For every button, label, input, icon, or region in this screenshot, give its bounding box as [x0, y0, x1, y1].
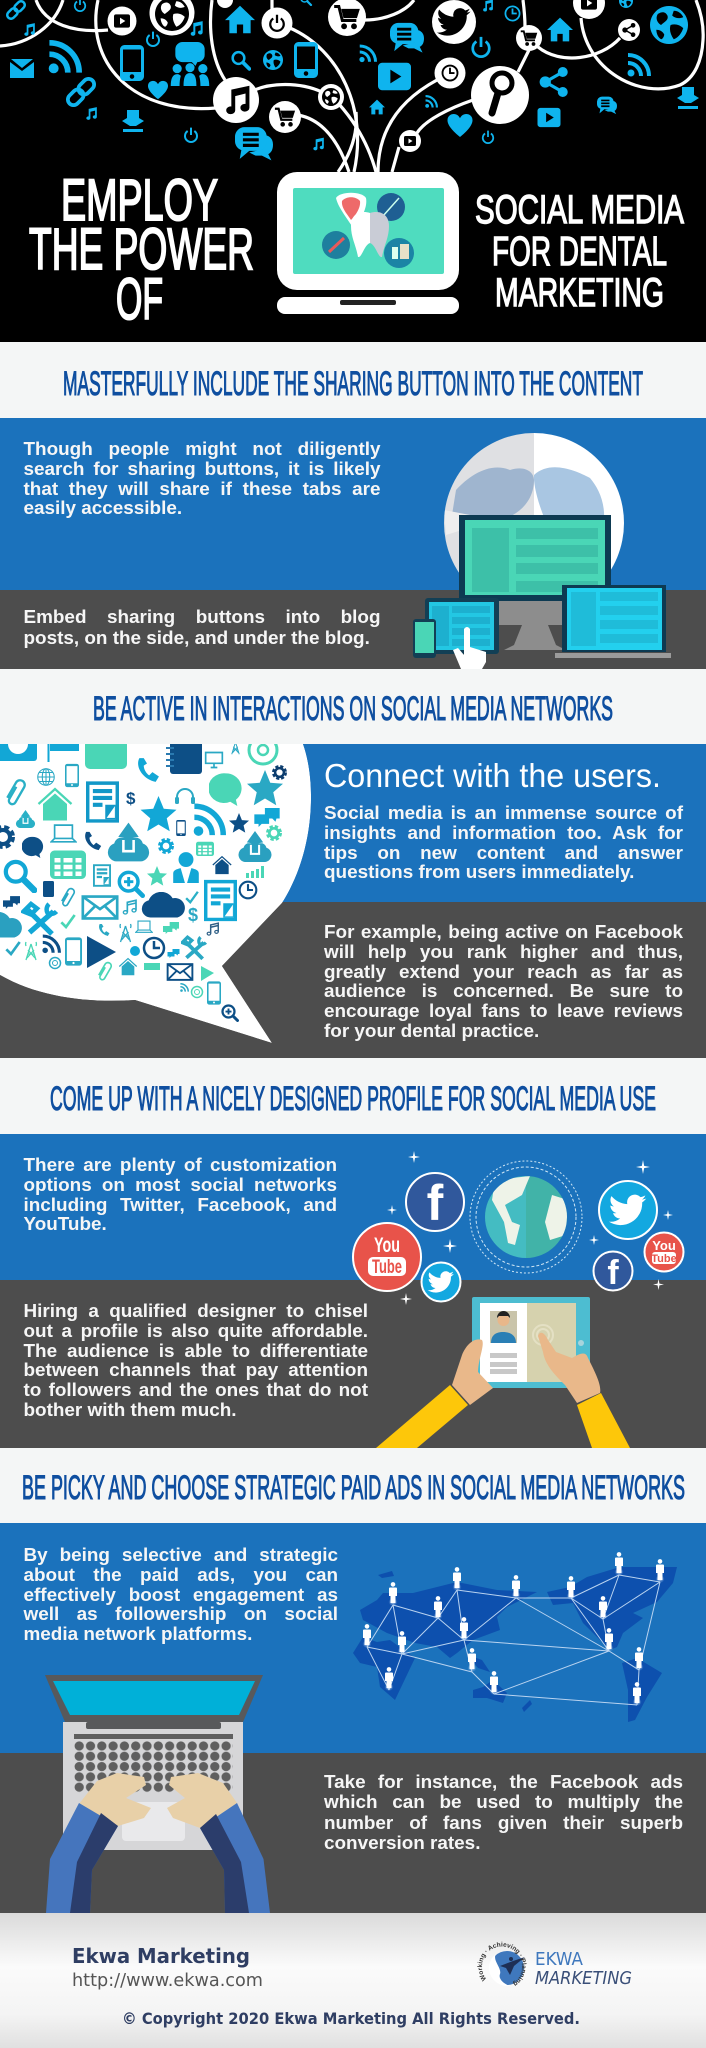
text: selective paid ads: about the paid ads, you can	[24, 1565, 338, 1586]
text: hiring designer: bother with them much.	[24, 1400, 237, 1421]
social icons: facebook, youtube, twitter: Tube	[372, 1257, 402, 1278]
text: facebook example: for your dental practice.	[324, 1021, 539, 1042]
panel 3 blue	[0, 1134, 706, 1280]
footer logo: Working · Achieving · Planning	[477, 1942, 527, 1986]
text: customization options: options on most social networks	[24, 1175, 337, 1196]
panel 1 blue	[0, 418, 706, 590]
title left: EMPLOY	[61, 168, 218, 233]
text: facebook example: greatly extend your reach as far as	[324, 962, 683, 983]
text: selective paid ads: media network platforms.	[24, 1624, 252, 1645]
footer company name and url: Ekwa Marketing	[72, 1944, 250, 1968]
social icons: facebook, youtube, twitter	[353, 1151, 684, 1305]
text: selective paid ads: well as followership on social	[24, 1604, 338, 1625]
speech bubble full of icons: $	[126, 789, 136, 808]
title left	[29, 168, 254, 332]
white icon nodes	[108, 0, 640, 152]
text: sharing intro: Though people might not diligently	[24, 439, 380, 460]
text: social media source: tips on new content and answer	[324, 843, 683, 864]
text: embed buttons	[24, 607, 380, 648]
panel 4 gray	[0, 1753, 706, 1913]
panel 2 blue	[0, 744, 706, 902]
text: embed buttons: posts, on the side, and under the blog.	[24, 628, 370, 648]
text: selective paid ads: By being selective and strategic	[24, 1545, 338, 1566]
text: sharing intro	[24, 439, 380, 519]
social icons: facebook, youtube, twitter: Tube	[651, 1253, 677, 1265]
footer copyright: © Copyright 2020 Ekwa Marketing All Rights Reserved.	[122, 2009, 580, 2028]
text: social media source: insights and information too. Ask for	[324, 823, 683, 844]
footer company name and url	[72, 1944, 263, 1991]
text: customization options: YouTube.	[24, 1214, 107, 1235]
text: hiring designer	[24, 1301, 368, 1421]
panel 1 gray	[0, 590, 706, 669]
text: customization options: There are plenty of customization	[24, 1155, 337, 1176]
social icons: facebook, youtube, twitter: You	[652, 1238, 676, 1253]
panel 3 gray	[0, 1280, 706, 1448]
social icons: facebook, youtube, twitter: f	[427, 1175, 444, 1231]
text: social media source: questions from users immediately.	[324, 862, 634, 883]
text: hiring designer: to followers and the ones that do not	[24, 1380, 368, 1401]
text: facebook example: encourage loyal fans to leave reviews	[324, 1001, 683, 1022]
text: selective paid ads	[24, 1545, 338, 1645]
title left: OF	[116, 267, 163, 332]
text: hiring designer: Hiring a qualified designer to chisel	[24, 1301, 368, 1322]
text: facebook ads: conversion rates.	[324, 1833, 480, 1854]
footer logo: EKWA	[535, 1949, 584, 1970]
text: facebook ads: Take for instance, the Facebook ads	[324, 1772, 683, 1793]
text: sharing intro: that they will share if these tabs are	[24, 479, 380, 500]
speech bubble full of icons	[0, 734, 311, 1043]
social network tree lines	[0, 0, 703, 172]
header black panel	[0, 0, 706, 342]
text: facebook example	[324, 922, 683, 1042]
illustration: laptop screen	[555, 585, 671, 658]
world network map	[353, 1552, 677, 1722]
illustration: laptop seen from above	[45, 1675, 263, 1850]
social icons: facebook, youtube, twitter: f	[607, 1254, 619, 1292]
text: facebook ads	[324, 1772, 683, 1854]
text: hiring designer: out a profile is also quite affordable.	[24, 1321, 368, 1342]
black node glyphs	[114, 0, 635, 146]
blue floating social icons	[6, 0, 699, 160]
text: facebook ads: which can be used to multiply the	[324, 1792, 683, 1813]
connect heading: Connect with the users.	[324, 757, 661, 794]
text: hiring designer: The audience is able to differentiate	[24, 1341, 368, 1362]
text: embed buttons: Embed sharing buttons into blog	[24, 607, 380, 628]
illustration: globe behind devices	[444, 433, 624, 573]
footer logo: MARKETING	[535, 1968, 632, 1989]
footer company name and url: http://www.ekwa.com	[72, 1970, 263, 1991]
text: customization options	[24, 1155, 337, 1235]
footer logo	[477, 1942, 632, 1989]
text: facebook example: audience is concerned. Be sure to	[324, 981, 683, 1002]
laptop with dental illustration	[277, 172, 459, 314]
illustration: desktop monitor	[459, 515, 611, 650]
title left: THE POWER	[29, 217, 254, 282]
text: social media source	[324, 803, 684, 883]
speech bubble full of icons: $	[188, 905, 198, 925]
text: facebook example: For example, being active on Facebook	[324, 922, 683, 943]
footer band	[0, 1913, 706, 2048]
text: customization options: including Twitter, Facebook, and	[24, 1195, 337, 1216]
text: social media source: Social media is an immense source of	[324, 803, 683, 824]
text: facebook example: will help you rank higher and thus,	[324, 942, 683, 963]
text: hiring designer: between channels that pay attention	[24, 1360, 368, 1381]
text: selective paid ads: effectively boost engagement as	[24, 1585, 338, 1606]
panel 4 blue	[0, 1523, 706, 1753]
text: sharing intro: easily accessible.	[24, 498, 182, 519]
title right	[475, 188, 684, 315]
text: sharing intro: search for sharing buttons, it is likely	[24, 459, 380, 480]
illustration: tablet and phone with pointer hand	[413, 598, 499, 669]
illustration: typing hands and sleeves	[46, 1773, 270, 1913]
panel 2 gray	[0, 902, 706, 1058]
illustration: tablet profile held by hands	[376, 1297, 630, 1448]
social icons: facebook, youtube, twitter: You	[374, 1234, 400, 1257]
illustration: globe with dashed rings	[470, 1161, 582, 1273]
text: facebook ads: number of fans given their superb	[324, 1813, 683, 1834]
